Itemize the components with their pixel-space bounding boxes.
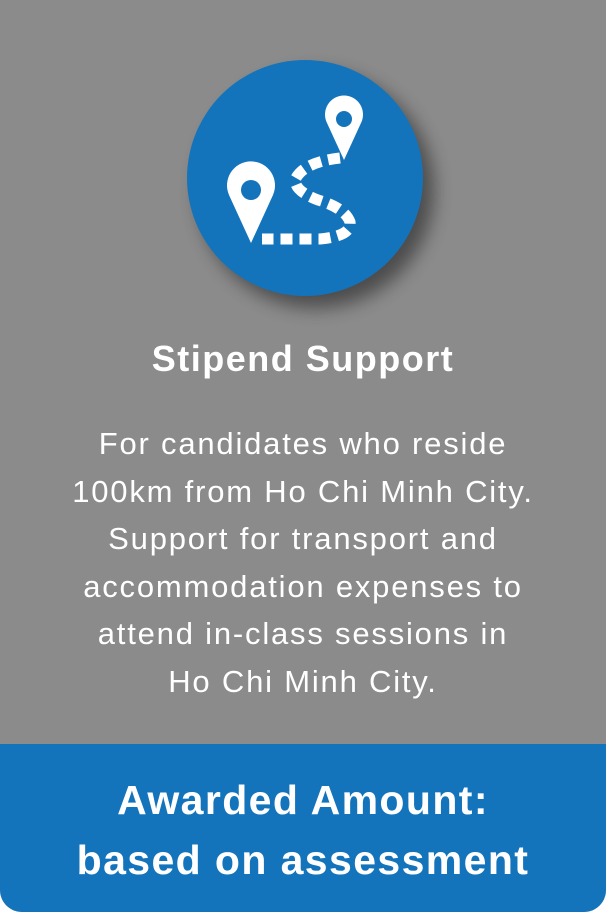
icon: route with map pins: [187, 60, 444, 318]
text block: description: For candidates who reside: [99, 426, 507, 461]
callout: awarded amount: based on assessment: [77, 837, 529, 883]
text block: description: Ho Chi Minh City.: [168, 664, 438, 698]
heading: Stipend Support: [152, 338, 454, 379]
callout: awarded amount: Awarded Amount:: [117, 777, 489, 823]
callout: awarded amount: [0, 744, 606, 912]
text block: description: Support for transport and: [108, 521, 498, 556]
text block: description: 100km from Ho Chi Minh City.: [72, 474, 534, 508]
text block: description: [72, 426, 534, 698]
text block: description: attend in-class sessions in: [98, 616, 508, 651]
text block: description: accommodation expenses to: [83, 568, 523, 604]
